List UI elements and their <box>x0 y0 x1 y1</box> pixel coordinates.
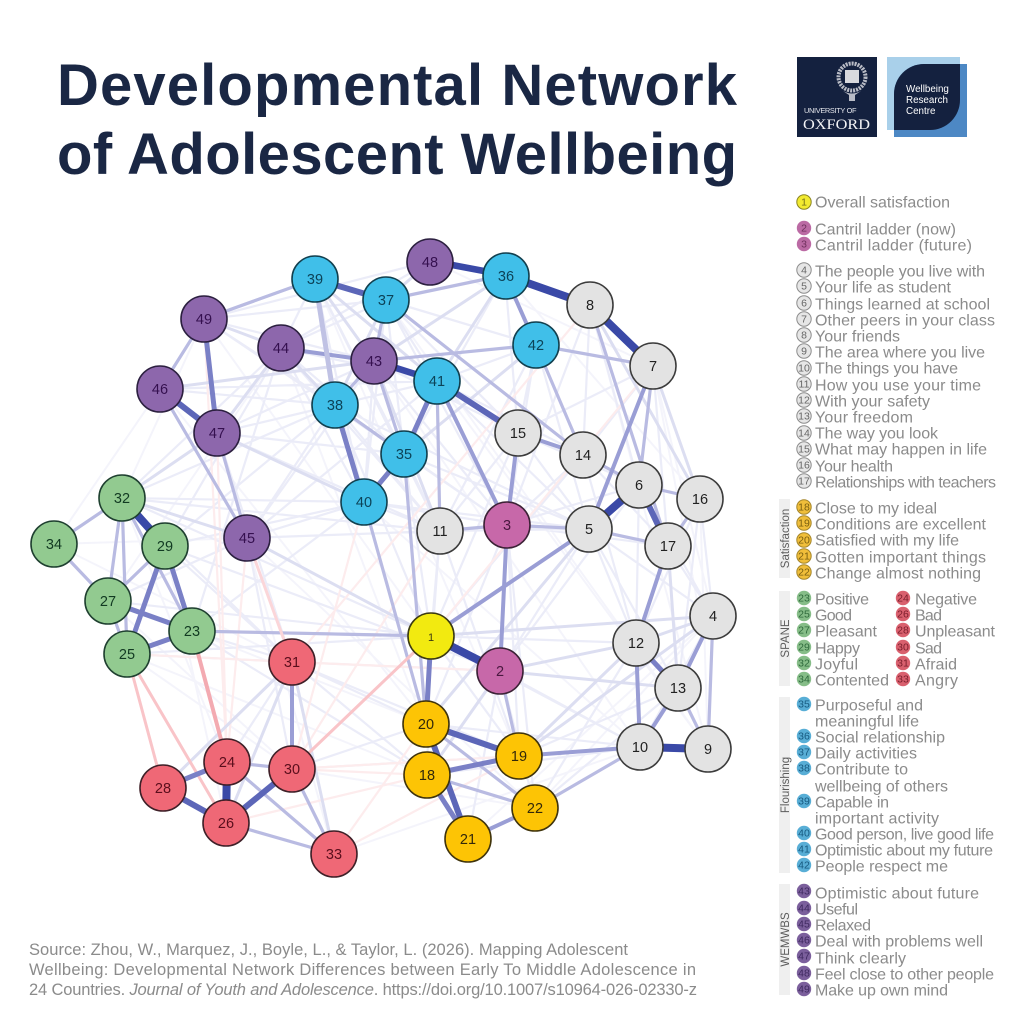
legend: life domains: Your life as student <box>815 280 952 296</box>
legend: Flourishing items: meaningful life <box>815 714 919 730</box>
node 24: 24 <box>219 755 235 771</box>
node 2 <box>477 648 523 694</box>
node 48 <box>407 239 453 285</box>
node 31 <box>269 639 315 685</box>
node 20 <box>403 701 449 747</box>
legend: Flourishing items: Contribute to <box>815 762 908 778</box>
node 32: 32 <box>114 491 130 507</box>
legend: SPANE positive items: 23 <box>798 592 810 604</box>
legend: SPANE positive items: 27 <box>798 624 810 636</box>
node 8 <box>567 282 613 328</box>
legend: life domains: 15 <box>798 444 810 456</box>
legend: WEMWBS items <box>797 884 994 1000</box>
node 49 <box>181 296 227 342</box>
node 25: 25 <box>119 647 135 663</box>
legend: WEMWBS band: WEMWBS <box>780 912 792 967</box>
legend: life domains: 9 <box>801 346 807 358</box>
legend: WEMWBS items: 48 <box>798 968 810 980</box>
legend: life domains: 4 <box>801 264 807 276</box>
node 45: 45 <box>239 531 255 547</box>
legend: life domains: 12 <box>798 394 810 406</box>
logo: Wellbeing Research Centre <box>887 57 967 137</box>
legend: Cantril ladder: 2 <box>801 222 807 234</box>
node 31: 31 <box>284 655 300 671</box>
legend: SPANE negative items <box>896 591 996 690</box>
node 28 <box>140 765 186 811</box>
node 39 <box>292 256 338 302</box>
node 18: 18 <box>419 768 435 784</box>
node 3 <box>484 502 530 548</box>
node 46: 46 <box>152 382 168 398</box>
legend: SPANE negative items: Afraid <box>915 656 957 674</box>
title <box>57 53 738 187</box>
logo: Wellbeing Research Centre: Wellbeing <box>906 84 949 95</box>
node 9 <box>685 726 731 772</box>
node 15: 15 <box>510 426 526 442</box>
legend: Flourishing items: 42 <box>798 860 810 872</box>
legend: SPANE negative items: 31 <box>897 658 909 670</box>
node 36: 36 <box>498 269 514 285</box>
legend: Cantril ladder: 3 <box>801 238 807 250</box>
legend: Flourishing items: 37 <box>798 746 810 758</box>
source citation: 24 Countries. Journal of Youth and Adolescence. https://doi.org/10.1007/s10964-026-02330-z <box>29 981 697 999</box>
node 4 <box>690 593 736 639</box>
legend: SPANE negative items: Negative <box>915 592 977 608</box>
node 1: 1 <box>428 632 434 644</box>
node 21: 21 <box>460 832 476 848</box>
node 26 <box>203 800 249 846</box>
legend: life domains: 14 <box>798 428 810 440</box>
node 20: 20 <box>418 717 434 733</box>
node 43 <box>351 338 397 384</box>
network nodes <box>31 239 736 877</box>
legend: life domains: The things you have <box>815 360 958 378</box>
legend: life domains: 6 <box>801 298 807 310</box>
node 14 <box>560 432 606 478</box>
legend: SPANE positive items: 29 <box>798 642 810 654</box>
node 39: 39 <box>307 272 323 288</box>
node 7: 7 <box>649 359 657 375</box>
legend: SPANE negative items: 33 <box>897 674 909 686</box>
legend: life domains: Things learned at school <box>815 296 990 314</box>
node 49: 49 <box>196 312 212 328</box>
node 10: 10 <box>632 740 648 756</box>
node 14: 14 <box>575 448 591 464</box>
node 33: 33 <box>326 847 342 863</box>
node 23 <box>169 608 215 654</box>
node 34 <box>31 521 77 567</box>
node 38 <box>312 382 358 428</box>
legend: life domains: 16 <box>798 460 810 472</box>
node 18 <box>404 752 450 798</box>
legend: WEMWBS items: Optimistic about future <box>815 886 979 902</box>
legend: SPANE positive items: 32 <box>798 658 810 670</box>
legend: life domains: The people you live with <box>815 264 985 280</box>
legend: SPANE negative items: 26 <box>897 608 909 620</box>
node 45 <box>224 515 270 561</box>
source citation: Source: Zhou, W., Marquez, J., Boyle, L., & Taylor, L. (2026). Mapping Adolescent <box>29 941 628 959</box>
legend: life domains: The area where you live <box>815 344 985 362</box>
node 29: 29 <box>157 539 173 555</box>
node 41 <box>414 358 460 404</box>
node 6 <box>616 462 662 508</box>
node 26: 26 <box>218 816 234 832</box>
legend: Flourishing items: Social relationship <box>815 730 945 746</box>
legend: Cantril ladder: Cantril ladder (now) <box>815 222 956 238</box>
legend: Satisfaction items: Satisfied with my life <box>815 532 959 550</box>
legend: Flourishing items: 38 <box>798 762 810 774</box>
node 30: 30 <box>284 762 300 778</box>
node 28: 28 <box>155 781 171 797</box>
legend: Flourishing items: important activity <box>815 810 939 828</box>
legend: Flourishing items: People respect me <box>815 858 948 876</box>
legend: Flourishing items: 36 <box>798 730 810 742</box>
node 12 <box>613 620 659 666</box>
legend: SPANE band: SPANE <box>780 619 792 658</box>
legend: SPANE positive items: Positive <box>815 592 869 608</box>
legend: SPANE positive items: 34 <box>798 674 810 686</box>
legend: SPANE negative items: Bad <box>915 608 942 624</box>
legend: life domains: Your freedom <box>815 410 913 426</box>
node 15 <box>495 410 541 456</box>
node 12: 12 <box>628 636 644 652</box>
node 17 <box>645 523 691 569</box>
node 2: 2 <box>496 664 504 680</box>
legend: WEMWBS items: 46 <box>798 934 810 946</box>
node 3: 3 <box>503 518 511 534</box>
legend: life domains: What may happen in life <box>815 442 987 458</box>
legend: SPANE negative items: 28 <box>897 624 909 636</box>
node 37 <box>363 277 409 323</box>
node 38: 38 <box>327 398 343 414</box>
logo: Wellbeing Research Centre: Research <box>906 95 948 106</box>
node 48: 48 <box>422 255 438 271</box>
node 7 <box>630 343 676 389</box>
node 9: 9 <box>704 742 712 758</box>
node 23: 23 <box>184 624 200 640</box>
node 34: 34 <box>46 537 62 553</box>
node 47 <box>194 410 240 456</box>
legend: WEMWBS band <box>779 884 792 995</box>
legend: Flourishing items <box>797 697 994 876</box>
legend: WEMWBS items: 44 <box>798 902 810 914</box>
legend: overall satisfaction: Overall satisfaction <box>815 194 950 212</box>
title: Developmental Network <box>57 53 738 118</box>
legend: WEMWBS items: Deal with problems well <box>815 934 983 950</box>
node 27 <box>85 578 131 624</box>
legend: Satisfaction items: Conditions are excellent <box>815 516 987 534</box>
legend: WEMWBS items: Feel close to other people <box>815 966 994 984</box>
legend: life domains: Other peers in your class <box>815 312 995 330</box>
legend: Flourishing items: Purposeful and <box>815 698 923 714</box>
node 46 <box>137 366 183 412</box>
legend: life domains: 11 <box>799 378 810 390</box>
node 10 <box>617 724 663 770</box>
node 22: 22 <box>527 801 543 817</box>
legend: WEMWBS items: Make up own mind <box>815 982 948 1000</box>
legend: Satisfaction items <box>797 500 987 582</box>
legend: SPANE negative items: Sad <box>915 640 942 658</box>
node 22 <box>512 785 558 831</box>
legend: Satisfaction band: Satisfaction <box>780 509 792 568</box>
node 6: 6 <box>635 478 643 494</box>
logo: University of Oxford: UNIVERSITY OF <box>804 106 857 115</box>
legend: life domains: 13 <box>798 410 810 422</box>
legend: Satisfaction items: 19 <box>798 518 810 530</box>
legend: SPANE positive items: Good <box>815 608 852 624</box>
node 29 <box>142 523 188 569</box>
legend: WEMWBS items: Relaxed <box>815 918 871 934</box>
legend: overall satisfaction: 1 <box>801 196 807 208</box>
node 8: 8 <box>586 298 594 314</box>
legend: Satisfaction items: 21 <box>798 550 810 562</box>
legend: Satisfaction items: 22 <box>798 566 810 578</box>
node 4: 4 <box>709 609 717 625</box>
legend: life domains: Your health <box>815 458 893 476</box>
node 5: 5 <box>585 522 593 538</box>
legend: SPANE positive items: Contented <box>815 672 889 690</box>
legend: SPANE negative items: 24 <box>897 592 909 604</box>
legend: Flourishing band <box>779 697 792 873</box>
legend: SPANE positive items: Pleasant <box>815 624 878 640</box>
node 44 <box>258 325 304 371</box>
legend: life domains: 10 <box>798 362 810 374</box>
legend: Satisfaction items: 18 <box>798 502 810 514</box>
node 19 <box>496 733 542 779</box>
legend: Flourishing items: 40 <box>798 828 810 840</box>
legend: WEMWBS items: 47 <box>798 950 810 962</box>
node 40 <box>341 479 387 525</box>
node 42 <box>513 322 559 368</box>
legend: Flourishing items: Optimistic about my future <box>815 842 993 860</box>
node 32 <box>99 475 145 521</box>
title: of Adolescent Wellbeing <box>57 122 737 187</box>
node 19: 19 <box>511 749 527 765</box>
legend: SPANE positive items: 25 <box>798 608 810 620</box>
legend: SPANE band <box>779 591 792 686</box>
legend: life domains: 7 <box>801 314 807 326</box>
legend: life domains: Your friends <box>815 328 900 346</box>
legend: Cantril ladder: Cantril ladder (future) <box>815 238 972 254</box>
legend <box>779 194 996 1000</box>
network edges <box>54 261 713 854</box>
node 42: 42 <box>528 338 544 354</box>
legend: SPANE negative items: 30 <box>897 642 909 654</box>
legend: Flourishing items: 41 <box>798 844 810 856</box>
logo: University of Oxford: OXFORD <box>803 117 870 133</box>
node 11: 11 <box>432 524 448 540</box>
legend: life domains: 8 <box>801 330 807 342</box>
node 35: 35 <box>396 447 412 463</box>
legend: WEMWBS items: 43 <box>798 886 810 898</box>
legend: Flourishing items: 39 <box>798 796 810 808</box>
node 44: 44 <box>273 341 289 357</box>
node 40: 40 <box>356 495 372 511</box>
legend: life domains: Relationships with teachers <box>815 474 996 492</box>
node 36 <box>483 253 529 299</box>
node 1 <box>408 613 454 659</box>
node 13: 13 <box>670 681 686 697</box>
node 25 <box>104 631 150 677</box>
legend: WEMWBS items: Think clearly <box>815 950 906 968</box>
legend: SPANE negative items: Unpleasant <box>915 624 996 640</box>
legend: WEMWBS items: Useful <box>815 902 858 918</box>
legend: life domains: The way you look <box>815 426 939 442</box>
node 30 <box>269 746 315 792</box>
node 27: 27 <box>100 594 116 610</box>
legend: Flourishing items: wellbeing of others <box>814 778 948 796</box>
node 33 <box>311 831 357 877</box>
legend: life domains: How you use your time <box>815 378 981 394</box>
legend: life domains: 5 <box>801 280 807 292</box>
source citation: Wellbeing: Developmental Network Differences between Early To Middle Adolescence in <box>29 961 696 979</box>
legend: Satisfaction items: Close to my ideal <box>815 500 937 518</box>
node 43: 43 <box>366 354 382 370</box>
legend: Flourishing band: Flourishing <box>780 757 792 813</box>
node 11 <box>417 508 463 554</box>
legend: SPANE positive items: Joyful <box>815 656 858 674</box>
legend: Flourishing items: Good person, live good life <box>815 826 994 844</box>
logo: Wellbeing Research Centre: Centre <box>906 106 936 117</box>
logo: University of Oxford <box>797 57 877 137</box>
legend: WEMWBS items: 45 <box>798 918 810 930</box>
node 41: 41 <box>429 374 445 390</box>
node 13 <box>655 665 701 711</box>
node 5 <box>566 506 612 552</box>
node 21 <box>445 816 491 862</box>
node 37: 37 <box>378 293 394 309</box>
legend: Satisfaction band <box>779 499 792 578</box>
legend: Flourishing items: Capable in <box>815 794 889 812</box>
legend: life domains <box>797 263 996 492</box>
legend: SPANE positive items: Happy <box>815 640 860 658</box>
node 35 <box>381 431 427 477</box>
node 17: 17 <box>660 539 676 555</box>
node 16: 16 <box>692 492 708 508</box>
source citation <box>29 941 697 999</box>
node 24 <box>204 739 250 785</box>
legend: Satisfaction items: 20 <box>798 534 810 546</box>
node 16 <box>677 476 723 522</box>
legend: WEMWBS items: 49 <box>798 984 810 996</box>
legend: Cantril ladder <box>797 221 972 254</box>
legend: Satisfaction items: Gotten important things <box>815 550 986 566</box>
legend: SPANE negative items: Angry <box>915 672 958 690</box>
legend: life domains: With your safety <box>815 394 930 410</box>
legend: life domains: 17 <box>798 476 810 488</box>
legend: SPANE positive items <box>797 591 889 690</box>
legend: Flourishing items: Daily activities <box>815 746 917 762</box>
node 47: 47 <box>209 426 225 442</box>
legend: Satisfaction items: Change almost nothing <box>815 566 981 582</box>
legend: Flourishing items: 35 <box>798 698 810 710</box>
